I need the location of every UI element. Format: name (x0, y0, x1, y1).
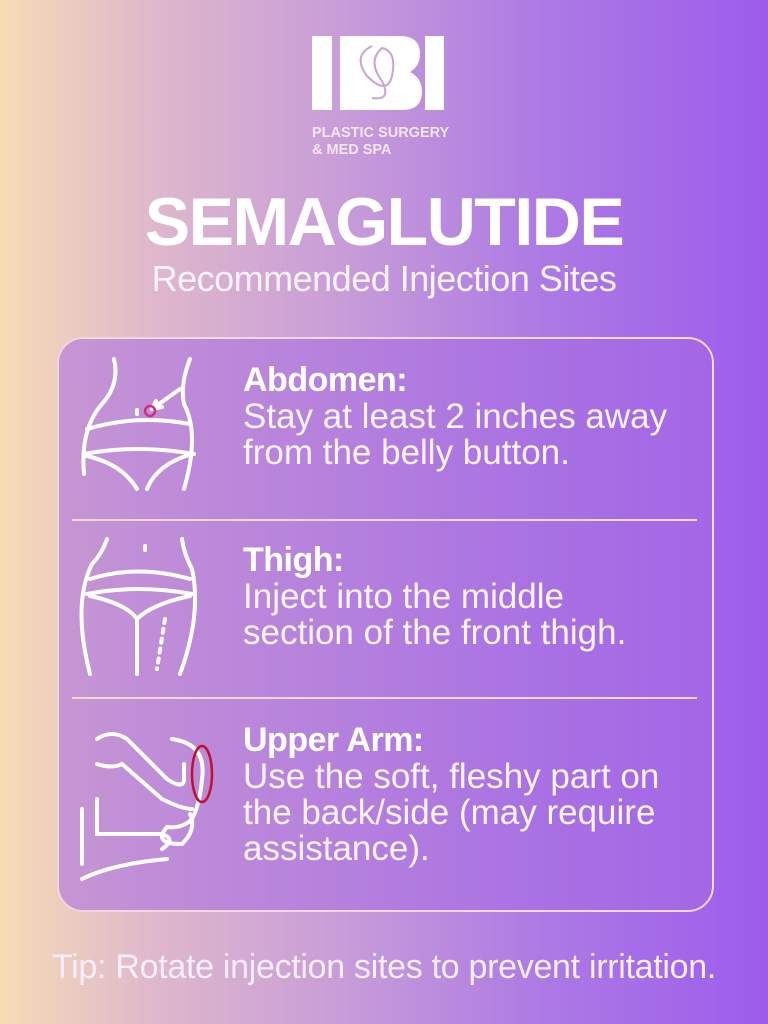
text: upper arm (243, 721, 659, 868)
tip: Tip: Rotate injection sites to prevent irritation. (52, 948, 716, 986)
icon: abdomen (81, 356, 196, 492)
text: abdomen: from the belly button. (243, 433, 570, 472)
logo (312, 36, 449, 158)
icon: thigh (80, 537, 198, 676)
subtitle: Recommended Injection Sites (152, 258, 616, 299)
text: thigh: Inject into the middle (243, 577, 564, 616)
logo: PLASTIC SURGERY (312, 125, 449, 141)
text: upper arm: assistance). (243, 829, 430, 868)
text: upper arm: the back/side (may require (243, 793, 655, 832)
logo: & MED SPA (312, 142, 392, 158)
panel (57, 337, 714, 912)
divider (72, 697, 697, 699)
text: thigh: section of the front thigh. (243, 613, 626, 652)
divider (72, 519, 697, 521)
text: abdomen: Stay at least 2 inches away (243, 397, 667, 436)
text: thigh (243, 541, 626, 652)
text: upper arm: Use the soft, fleshy part on (243, 757, 659, 796)
text: abdomen: Abdomen: (243, 361, 407, 399)
text: abdomen (243, 361, 667, 472)
text: upper arm: Upper Arm: (243, 721, 424, 759)
title: SEMAGLUTIDE (145, 184, 623, 260)
text: thigh: Thigh: (243, 541, 344, 579)
icon: upper arm (80, 732, 214, 882)
